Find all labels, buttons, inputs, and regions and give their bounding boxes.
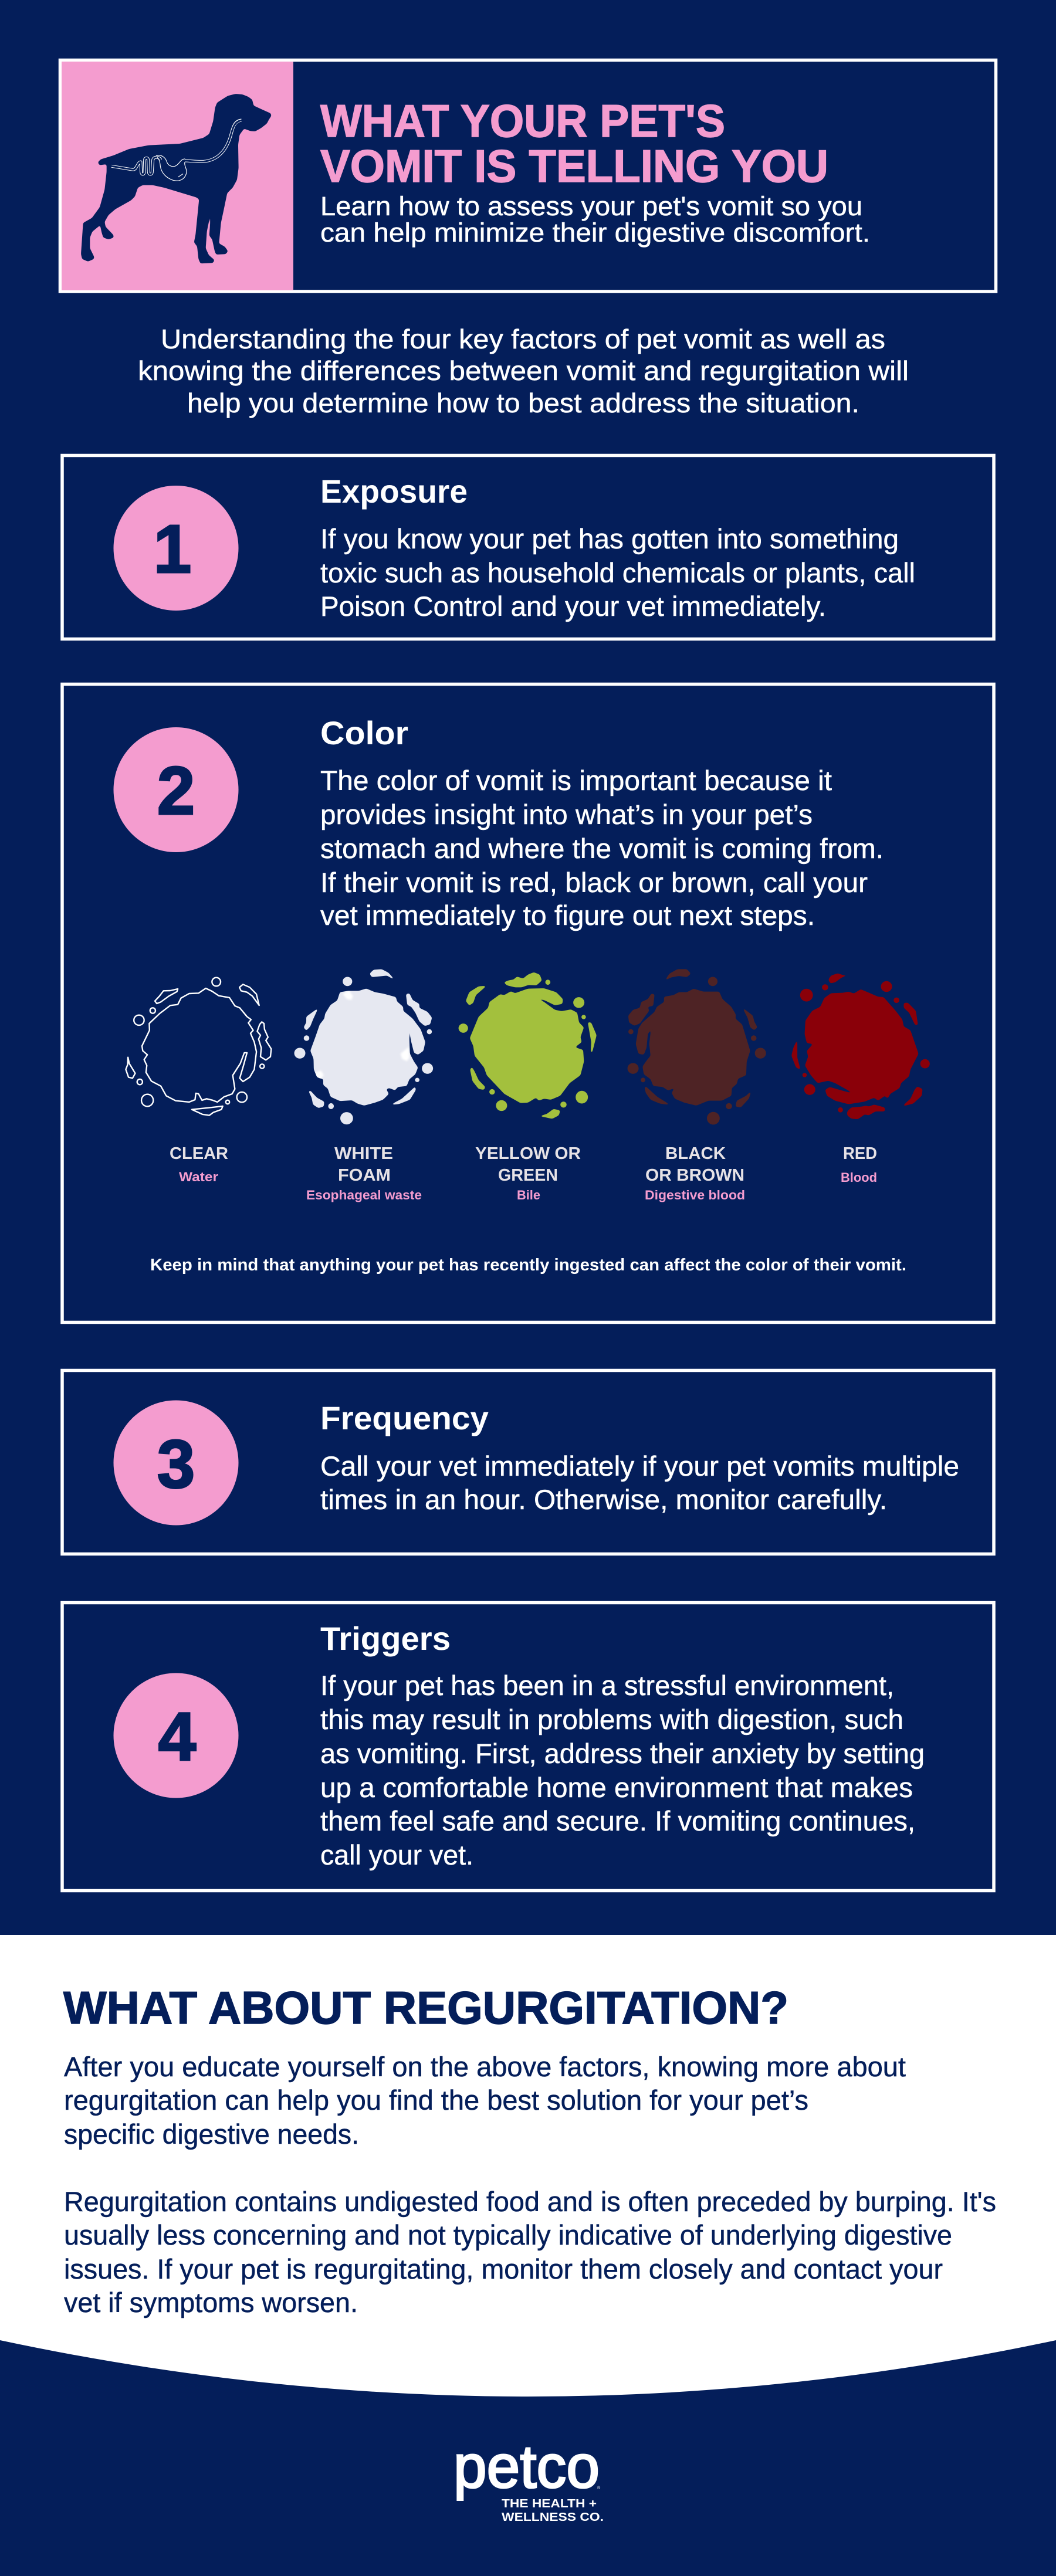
panel: triggers [62, 1602, 994, 1891]
text: triggers body: them feel safe and secure. If vomiting continues, [320, 1805, 915, 1836]
text: color body: vet immediately to figure out next steps. [320, 900, 815, 931]
dog illustration panel [62, 62, 293, 290]
icon: yellow or green vomit splat [458, 972, 597, 1119]
text: regurgitation details [64, 2186, 996, 2318]
heading: color: Color [320, 714, 408, 751]
number badge 3 [114, 1401, 238, 1525]
panel: exposure [62, 455, 994, 639]
panel: color [62, 684, 994, 1322]
panel: what about regurgitation [0, 1935, 1056, 2397]
icon: red vomit splat [791, 973, 930, 1119]
text: regurgitation intro: After you educate yourself on the above factors, knowing more about [64, 2051, 906, 2082]
subtitle: can help minimize their digestive discomfort. [320, 218, 870, 248]
text: exposure body [320, 523, 915, 622]
label: black or brown: Digestive blood [645, 1188, 745, 1202]
text: regurgitation details: Regurgitation contains undigested food and is often preceded by burping. It's [64, 2186, 996, 2217]
text: triggers body [320, 1670, 925, 1870]
intro paragraph: Understanding the four key factors of pet vomit as well as [161, 324, 885, 354]
label: red [841, 1144, 877, 1185]
text: frequency body: times in an hour. Otherwise, monitor carefully. [320, 1484, 887, 1515]
label: clear: Water [179, 1170, 218, 1184]
number badge 4 [114, 1673, 238, 1798]
label: yellow or green: YELLOW OR [475, 1144, 581, 1163]
heading: exposure: Exposure [320, 473, 468, 510]
label: yellow or green: GREEN [498, 1166, 558, 1185]
icon: dog silhouette with digestive tract [81, 94, 272, 263]
intro paragraph [138, 324, 909, 418]
text: frequency body: Call your vet immediately if your pet vomits multiple [320, 1450, 959, 1482]
text: triggers body: up a comfortable home environment that makes [320, 1772, 913, 1803]
label: white foam: FOAM [338, 1166, 391, 1185]
number badge 2: 2 [157, 753, 195, 829]
text: regurgitation intro: specific digestive needs. [64, 2119, 359, 2150]
title [320, 95, 828, 192]
text: triggers body: as vomiting. First, address their anxiety by setting [320, 1738, 925, 1769]
text: exposure body: toxic such as household chemicals or plants, call [320, 557, 915, 588]
text: color body: provides insight into what’s in your pet’s [320, 799, 813, 830]
text: triggers body: call your vet. [320, 1839, 473, 1870]
text: color body: stomach and where the vomit is coming from. [320, 833, 884, 864]
text: regurgitation intro: regurgitation can help you find the best solution for your pet’s [64, 2084, 808, 2116]
number badge 3: 3 [157, 1426, 195, 1502]
label: yellow or green [475, 1144, 581, 1202]
label: white foam [306, 1144, 422, 1202]
panel: frequency [62, 1370, 994, 1554]
text: triggers body: If your pet has been in a stressful environment, [320, 1670, 894, 1701]
label: yellow or green: Bile [517, 1188, 540, 1202]
text: frequency body [320, 1450, 959, 1515]
label: white foam: Esophageal waste [306, 1188, 422, 1202]
label: black or brown [645, 1144, 745, 1202]
number badge 1 [114, 486, 238, 611]
text: regurgitation details: usually less concerning and not typically indicative of underlying digestive [64, 2219, 952, 2250]
icon: clear vomit splat [126, 978, 271, 1116]
label: white foam: WHITE [334, 1144, 393, 1163]
number badge 4: 4 [158, 1699, 196, 1775]
text: triggers body: this may result in problems with digestion, such [320, 1704, 903, 1735]
label: clear: CLEAR [170, 1144, 228, 1163]
logo: petco: THE HEALTH + [502, 2497, 597, 2510]
text: regurgitation intro [64, 2051, 906, 2150]
text: regurgitation details: issues. If your pet is regurgitating, monitor them closely and contact your [64, 2253, 943, 2284]
header panel [60, 60, 996, 292]
text: color body [320, 765, 884, 931]
label: black or brown: BLACK [665, 1144, 726, 1163]
icon: white foam vomit splat [294, 969, 433, 1124]
label: clear [170, 1144, 228, 1184]
text: exposure body: If you know your pet has gotten into something [320, 523, 899, 554]
title: VOMIT IS TELLING YOU [320, 140, 828, 192]
intro paragraph: help you determine how to best address the situation. [187, 388, 859, 418]
heading: regurgitation: WHAT ABOUT REGURGITATION? [63, 1982, 788, 2033]
label: black or brown: OR BROWN [645, 1166, 744, 1185]
text: color body: The color of vomit is important because it [320, 765, 832, 796]
logo: petco: WELLNESS CO. [502, 2511, 604, 2524]
text: regurgitation details: vet if symptoms worsen. [64, 2287, 358, 2318]
icon: black or brown vomit splat [627, 969, 766, 1125]
heading: triggers: Triggers [320, 1620, 451, 1657]
text: exposure body: Poison Control and your vet immediately. [320, 591, 826, 622]
subtitle [320, 191, 870, 248]
number badge 1: 1 [154, 511, 191, 587]
note: ingested items: Keep in mind that anything your pet has recently ingested can affect the color of their vomit. [150, 1256, 906, 1275]
label: red: RED [843, 1144, 877, 1163]
heading: frequency: Frequency [320, 1399, 489, 1436]
logo: petco: ® [597, 2486, 601, 2490]
logo: petco: petco [453, 2433, 600, 2501]
text: color body: If their vomit is red, black or brown, call your [320, 867, 868, 898]
intro paragraph: knowing the differences between vomit and regurgitation will [138, 355, 909, 386]
subtitle: Learn how to assess your pet's vomit so you [320, 191, 862, 221]
label: red: Blood [841, 1170, 877, 1185]
title: WHAT YOUR PET'S [320, 95, 725, 147]
number badge 2 [114, 727, 238, 852]
